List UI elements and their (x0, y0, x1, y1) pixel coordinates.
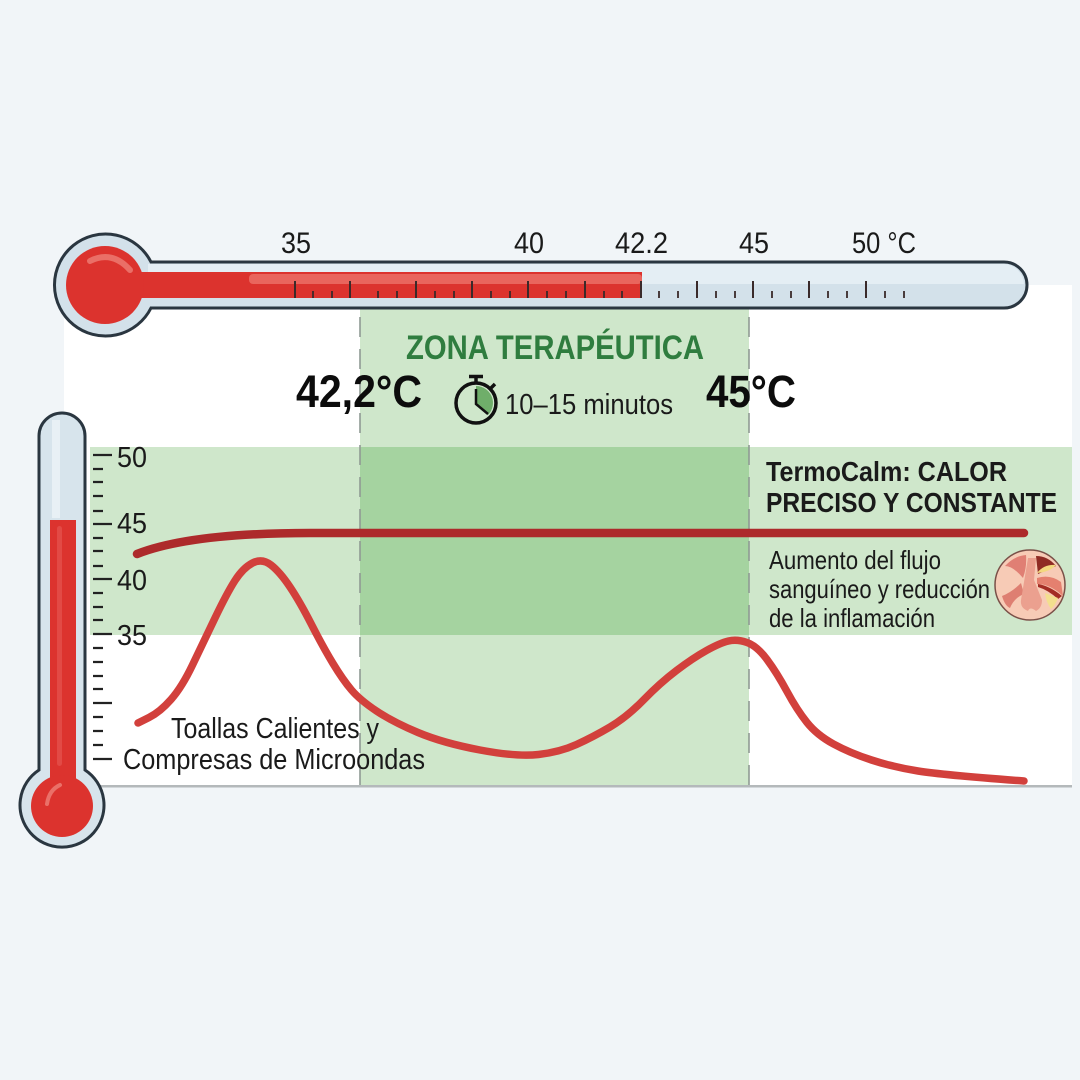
temperature scale ticks (295, 281, 866, 298)
vertical axis labels: 45 (117, 508, 147, 540)
vertical axis labels: 40 (117, 565, 147, 597)
callout: termocalm heading (766, 456, 1057, 518)
callout: benefit text: Aumento del flujo (769, 545, 941, 575)
mercury fill (31, 520, 93, 837)
vertical axis ticks (93, 455, 112, 759)
label: 45 C: 45°C (706, 366, 796, 417)
label: towels and compresses: Toallas Calientes y (171, 713, 379, 745)
callout: benefit text: de la inflamación (769, 603, 935, 633)
duration text: 10–15 minutos (505, 389, 673, 421)
vertical axis labels: 35 (117, 620, 147, 652)
label: 42,2 C: 42,2°C (296, 366, 422, 417)
horizontal thermometer (54, 234, 1027, 336)
label: towels and compresses (123, 713, 425, 776)
vertical axis labels: 50 (117, 442, 147, 474)
vertical thermometer (20, 413, 104, 847)
callout: benefit text: sanguíneo y reducción (769, 574, 990, 604)
icon: sinus cross-section (995, 550, 1065, 620)
horizontal scale labels (281, 227, 916, 260)
label: towels and compresses: Compresas de Microondas (123, 744, 425, 776)
heading: zona terapeutica: ZONA TERAPÉUTICA (406, 329, 704, 367)
horizontal scale labels: 50 °C (852, 227, 916, 260)
callout: termocalm heading: TermoCalm: CALOR (766, 456, 1007, 487)
line: towels and microwave compresses (138, 561, 1024, 781)
callout: benefit text (769, 545, 990, 633)
line: termocalm constant heat (137, 533, 1024, 554)
mercury fill (140, 272, 642, 298)
chart panel (64, 285, 1072, 788)
horizontal scale labels: 42.2 (615, 227, 668, 260)
horizontal scale labels: 40 (514, 227, 544, 260)
horizontal scale labels: 35 (281, 227, 311, 260)
vertical axis labels (117, 442, 147, 652)
icon: stopwatch (456, 376, 496, 423)
horizontal scale labels: 45 (739, 227, 769, 260)
